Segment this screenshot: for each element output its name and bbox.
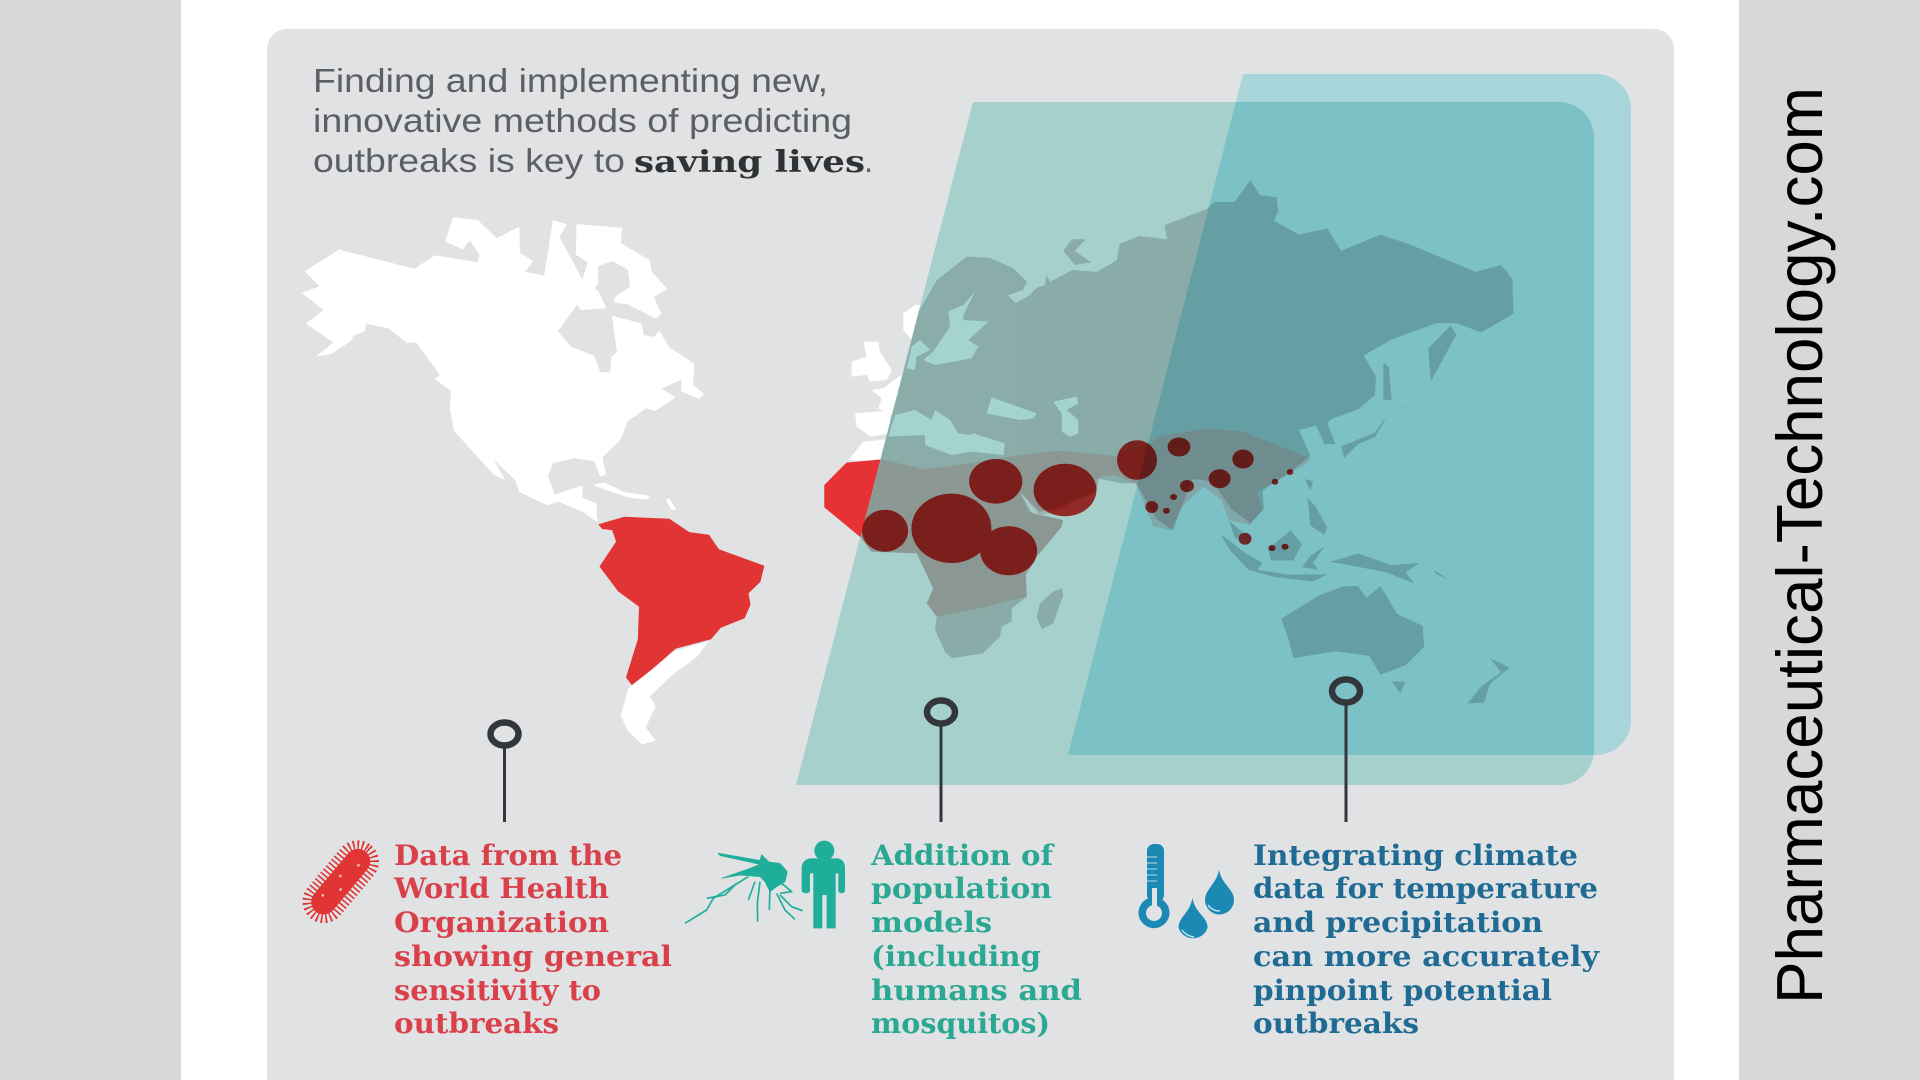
panel: overlap of overlays (1068, 102, 1594, 755)
panel: population model overlay (796, 102, 1594, 785)
pin: WHO data (490, 722, 518, 822)
text: climate data: pinpoint potential (1253, 974, 1552, 1007)
text: WHO data: Organization (394, 906, 609, 939)
title text: . (864, 142, 873, 179)
Australia and New Zealand (1281, 586, 1510, 703)
Japan and Sakhalin (1341, 325, 1456, 458)
map: West Africa red area (824, 459, 886, 537)
Mediterranean (888, 410, 1005, 455)
British Isles (852, 342, 892, 382)
map: land inside overlays (836, 180, 1513, 703)
text: climate data: can more accurately (1253, 940, 1600, 973)
text: population models (870, 839, 1082, 1040)
text: WHO data: showing general (394, 940, 672, 973)
South America red (598, 517, 764, 685)
text: population models: mosquitos) (871, 1007, 1050, 1040)
map: inland seas (888, 397, 1078, 455)
map: Americas (302, 217, 764, 744)
text: WHO data: outbreaks (394, 1007, 559, 1040)
icon: person (802, 841, 845, 928)
icon: bacterium (301, 839, 380, 924)
France coast (872, 373, 903, 415)
Africa (860, 458, 1063, 658)
South America southern tip (621, 641, 709, 744)
text: climate data: Integrating climate (1253, 839, 1578, 872)
text: WHO data (393, 839, 672, 1040)
icon: mosquito (685, 853, 803, 923)
Madagascar (1037, 588, 1063, 629)
text: WHO data: sensitivity to (394, 974, 601, 1007)
text: climate data: and precipitation (1253, 906, 1543, 939)
text: population models: humans and (871, 974, 1082, 1007)
icon: water drops (1179, 870, 1234, 938)
Caspian Sea (1053, 397, 1078, 437)
text: climate data: data for temperature (1253, 872, 1598, 905)
map: Baltic and North Sea (907, 292, 988, 370)
North America (302, 217, 704, 523)
Eurasia (836, 180, 1513, 530)
text: population models: (including (871, 940, 1041, 973)
icon: thermometer (1138, 844, 1170, 928)
pin: population models (927, 700, 955, 822)
text: population models: models (871, 906, 992, 939)
Black Sea (987, 397, 1037, 420)
title text: innovative methods of predicting (313, 102, 852, 139)
title text: outbreaks is key to (313, 142, 625, 179)
text: population models: population (871, 872, 1052, 905)
Morocco coast (848, 439, 887, 462)
map: Europe white coast outside panel (848, 305, 920, 462)
title text: saving lives (634, 145, 865, 180)
Iberia (855, 411, 890, 437)
map: outbreak circles (862, 438, 1293, 575)
text: WHO data: World Health (393, 872, 609, 905)
Asia islands (1221, 479, 1448, 584)
panel: climate model overlay (1068, 74, 1631, 755)
title text: Finding and implementing new, (313, 62, 828, 99)
text: climate data (1253, 839, 1600, 1040)
panel: grey card (267, 29, 1674, 1080)
pin: climate data (1332, 680, 1360, 822)
Norway tip (903, 305, 920, 340)
side label: publisher: Pharmaceutical-Technology.com (1763, 87, 1836, 1004)
text: climate data: outbreaks (1253, 1007, 1419, 1040)
title text (313, 62, 873, 180)
Novaya Zemlya (1063, 239, 1091, 265)
map: sensitivity band (861, 428, 1311, 617)
Caribbean islands (592, 482, 677, 510)
text: WHO data: Data from the (394, 839, 622, 872)
Arctic islands (576, 224, 667, 319)
text: population models: Addition of (870, 839, 1055, 872)
